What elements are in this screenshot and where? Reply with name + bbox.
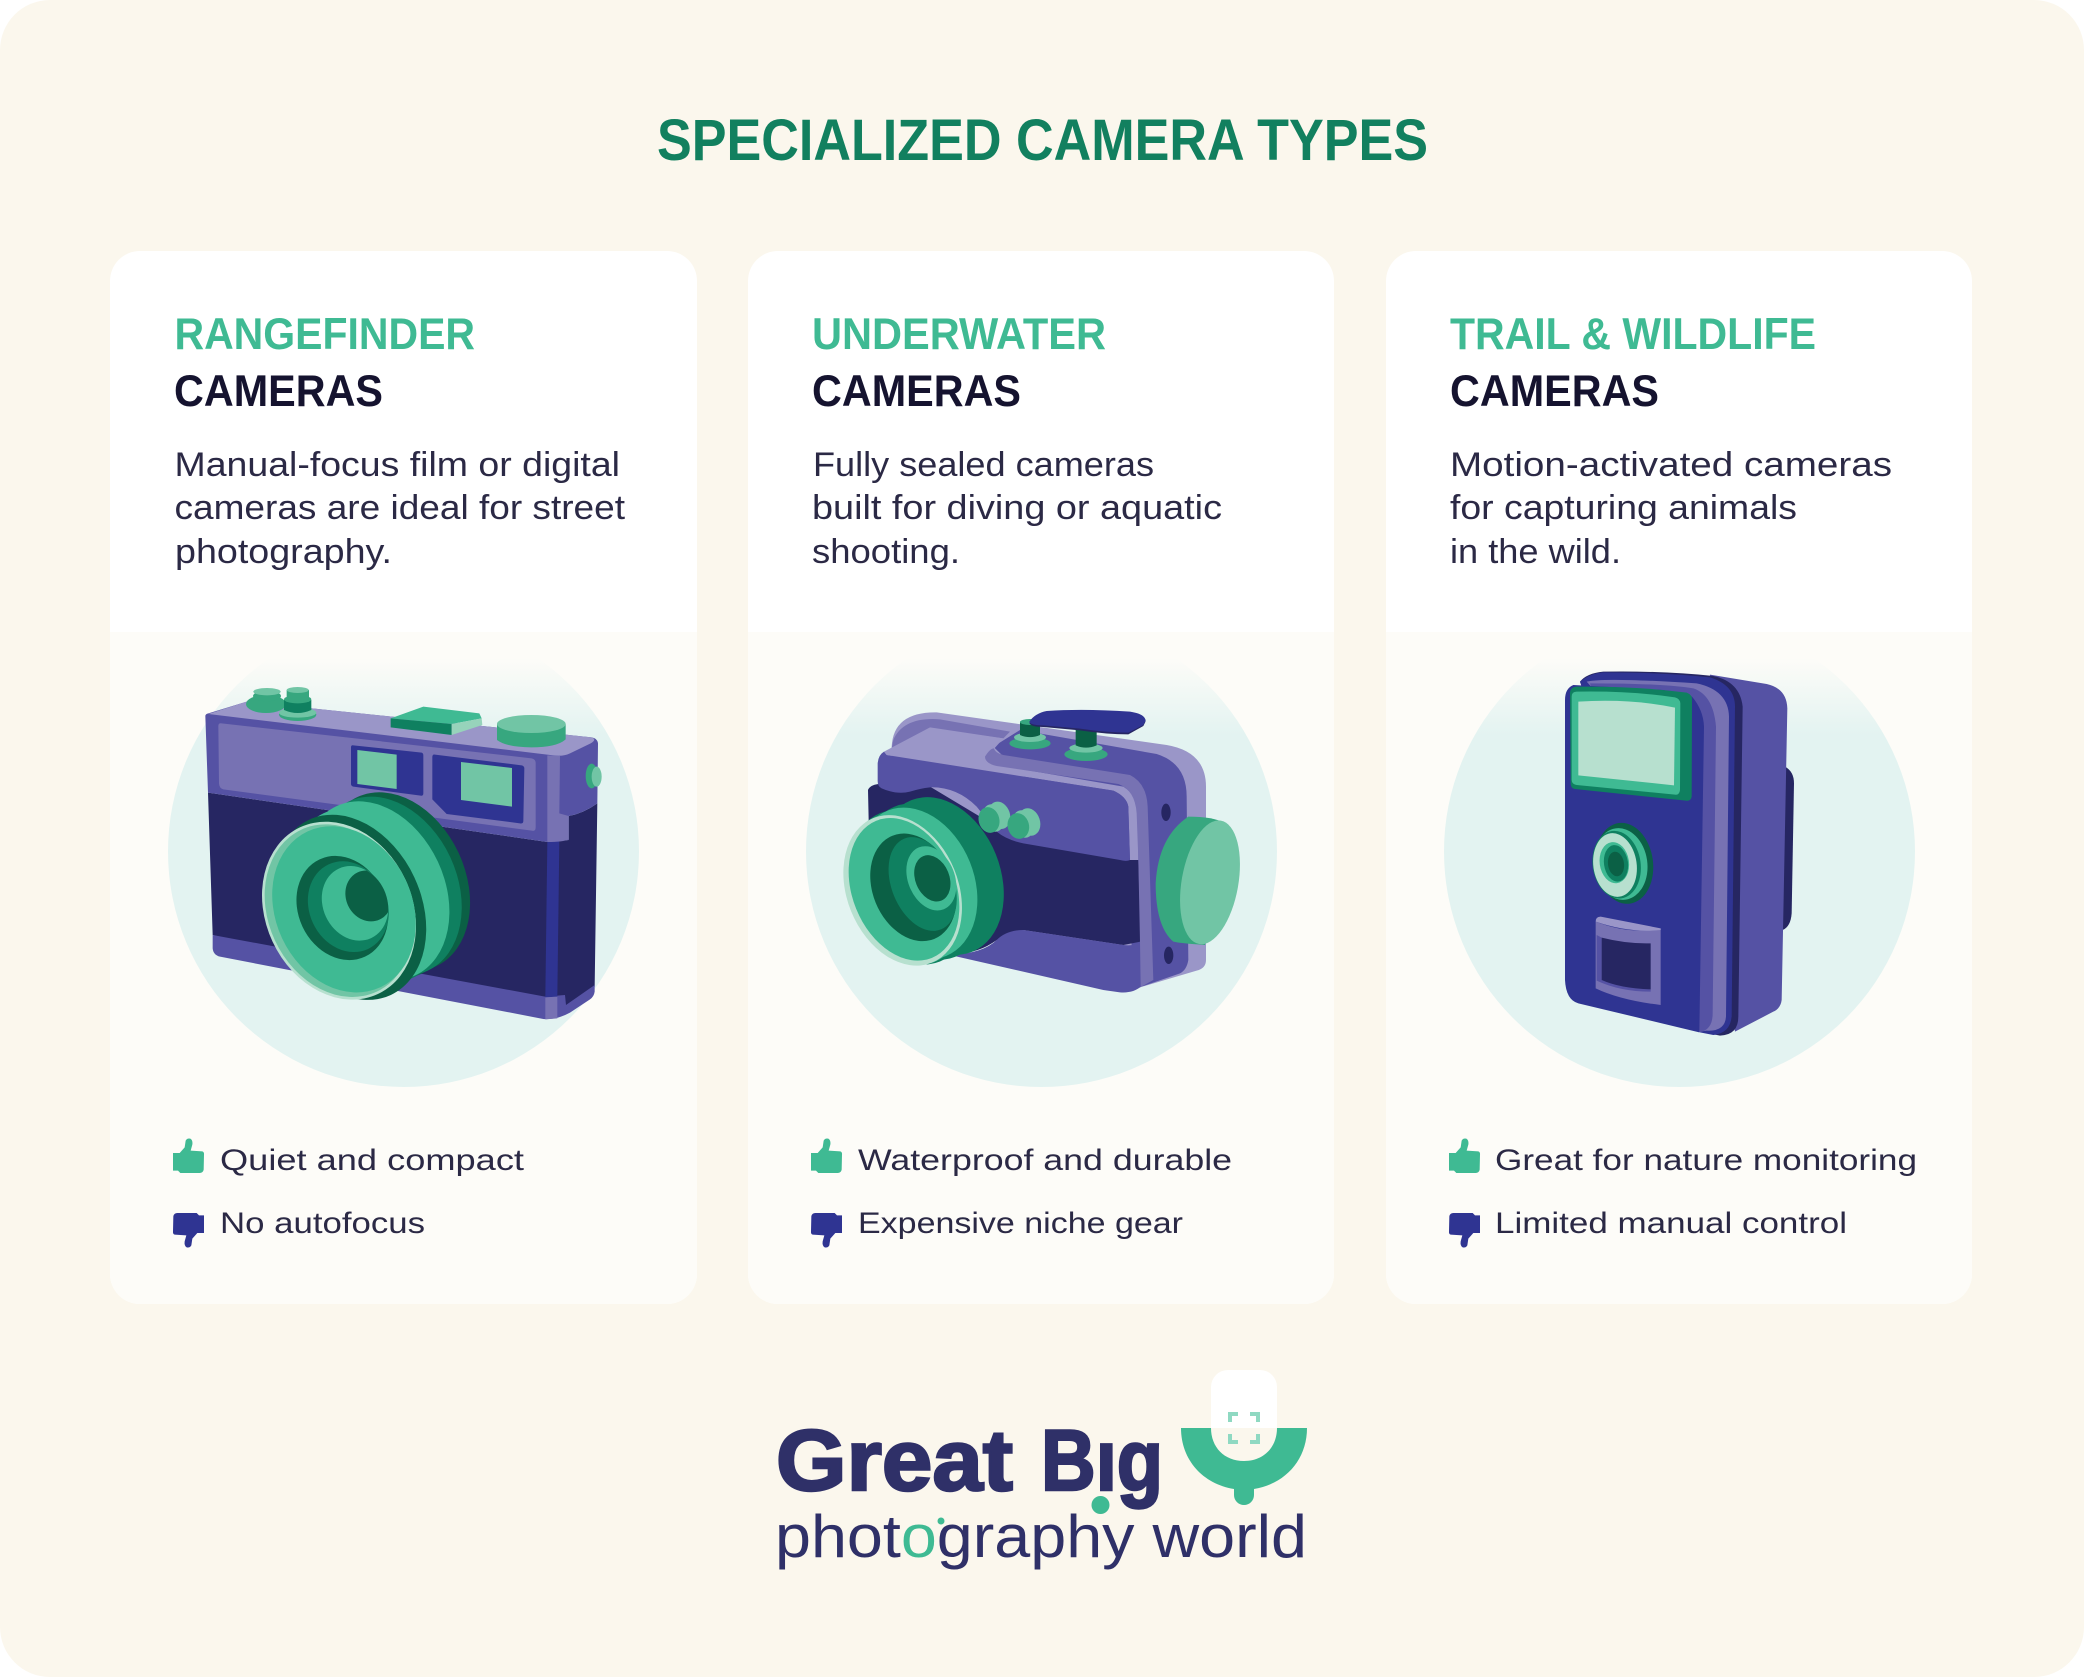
- screen: [1570, 687, 1692, 801]
- logo dot: [1092, 1496, 1110, 1514]
- description: underwater: [812, 446, 1222, 571]
- con: trail and wildlife: [1449, 1207, 1847, 1247]
- illustration: rangefinder camera: [205, 687, 602, 1025]
- description: rangefinder: cameras are ideal for street: [174, 489, 626, 527]
- heading: rangefinder: CAMERAS: [174, 367, 383, 416]
- logo mark: [1181, 1370, 1307, 1505]
- con: underwater: [811, 1207, 1183, 1247]
- pro: trail and wildlife: [1449, 1139, 1917, 1177]
- motion sensor: [1596, 917, 1661, 1005]
- lens: trail: [1588, 819, 1658, 908]
- small logo dot: [938, 1518, 944, 1524]
- con: rangefinder: [173, 1207, 425, 1247]
- heading: trail and wildlife: [1450, 310, 1816, 416]
- description: underwater: Fully sealed cameras: [813, 446, 1154, 484]
- con: trail and wildlife: Limited manual control: [1495, 1207, 1847, 1240]
- panel: underwater cameras: [748, 251, 1334, 1304]
- top knobs and handle: [1009, 710, 1146, 761]
- backdrop circle: rangefinder: [168, 616, 639, 1087]
- description: rangefinder: photography.: [175, 533, 392, 571]
- illustration: underwater camera: [822, 710, 1249, 992]
- heading: underwater: CAMERAS: [812, 367, 1021, 416]
- description: trail and wildlife: for capturing animals: [1450, 489, 1797, 527]
- logo: Great Big Photography World: Bıg: [1041, 1413, 1163, 1509]
- description: underwater: built for diving or aquatic: [812, 489, 1222, 527]
- con: underwater: Expensive niche gear: [858, 1207, 1183, 1240]
- lens: underwater: [822, 778, 1026, 984]
- illustration: trail camera: [1565, 672, 1794, 1036]
- heading: underwater: [812, 310, 1106, 416]
- description: trail and wildlife: in the wild.: [1450, 533, 1621, 571]
- side knobs: [976, 799, 1044, 841]
- pro: rangefinder: Quiet and compact: [220, 1144, 525, 1177]
- logo: Great Big Photography World: [775, 1370, 1307, 1570]
- wordmark: photography world: photography world: [775, 1503, 1307, 1570]
- heading: trail and wildlife: CAMERAS: [1450, 367, 1659, 416]
- backdrop circle: trail and wildlife: [1444, 616, 1915, 1087]
- wordmark: Great Big: Great: [776, 1413, 1013, 1509]
- heading: rangefinder: RANGEFINDER: [174, 310, 475, 359]
- description: rangefinder: [174, 446, 626, 571]
- description: underwater: shooting.: [812, 533, 960, 571]
- heading: underwater: UNDERWATER: [812, 310, 1106, 359]
- heading: rangefinder: [174, 310, 475, 416]
- description: trail and wildlife: [1450, 446, 1892, 571]
- con: rangefinder: No autofocus: [220, 1207, 425, 1240]
- panel: trail and wildlife cameras: [1386, 251, 1972, 1304]
- panel: rangefinder cameras: [110, 251, 697, 1304]
- description: trail and wildlife: Motion-activated cameras: [1450, 446, 1892, 484]
- lens: rangefinder: [262, 792, 470, 1000]
- heading: trail and wildlife: TRAIL & WILDLIFE: [1450, 310, 1816, 359]
- title: SPECIALIZED CAMERA TYPES: [657, 108, 1428, 173]
- pro: trail and wildlife: Great for nature monitoring: [1495, 1144, 1917, 1177]
- pro: rangefinder: [173, 1139, 525, 1177]
- backdrop circle: underwater: [806, 616, 1277, 1087]
- pro: underwater: [811, 1139, 1232, 1177]
- front dome: [1156, 816, 1249, 949]
- pro: underwater: Waterproof and durable: [858, 1144, 1232, 1177]
- description: rangefinder: Manual-focus film or digital: [174, 446, 620, 484]
